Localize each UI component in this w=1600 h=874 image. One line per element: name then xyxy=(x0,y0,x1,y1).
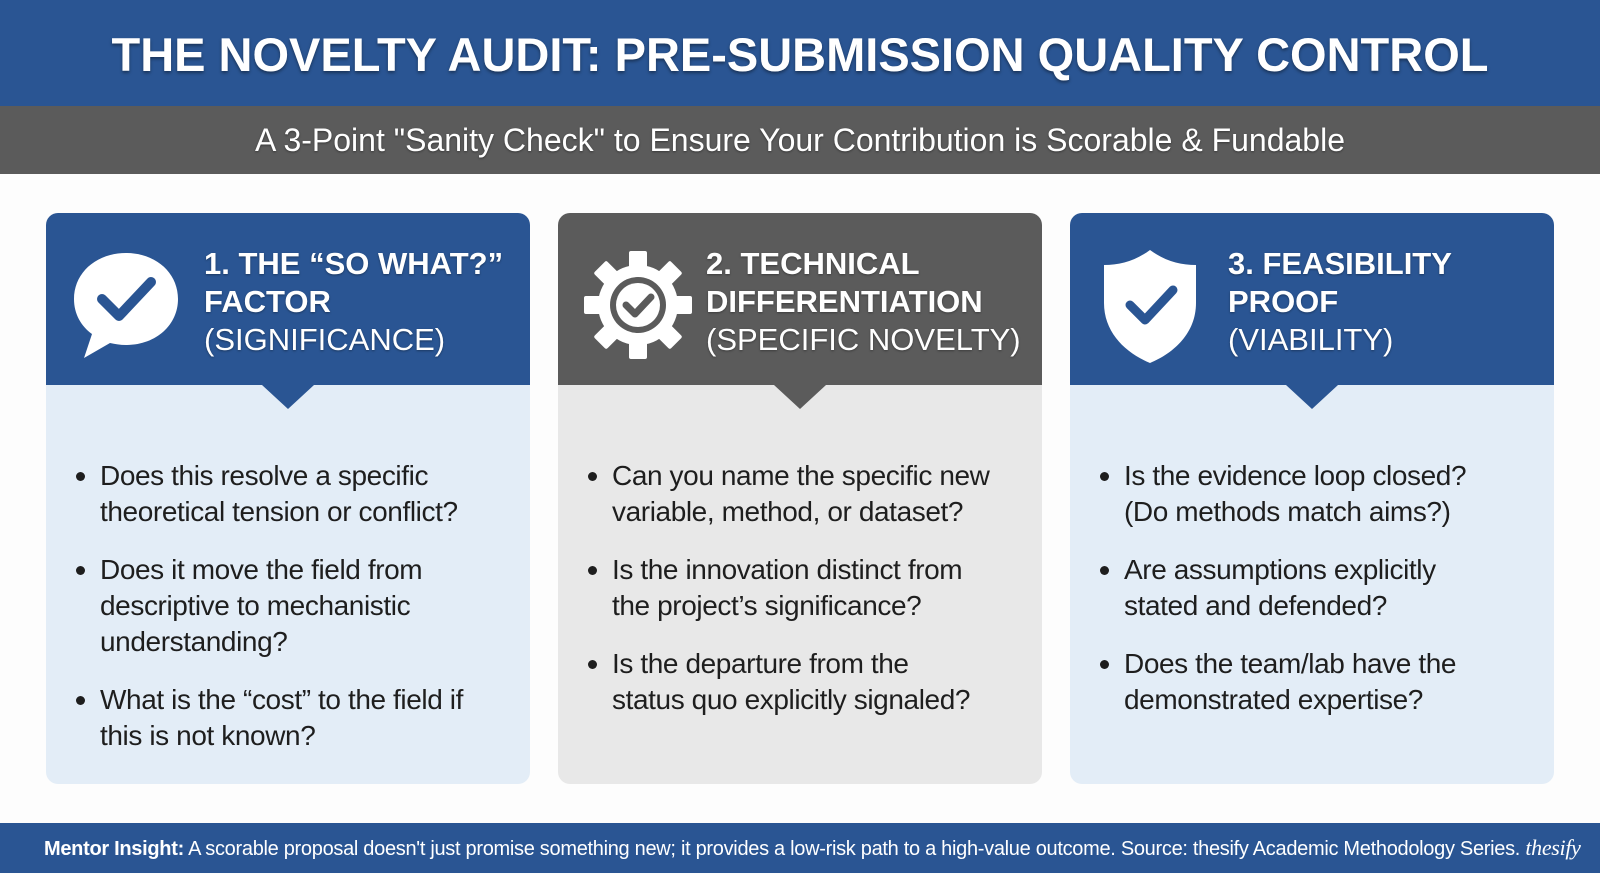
icon: speech bubble check xyxy=(74,253,178,358)
bullets 3: Is the evidence loop closed? xyxy=(1124,460,1466,491)
bullets 2: Is the departure from the xyxy=(612,648,909,679)
icon: gear check xyxy=(584,251,692,359)
heading 1 xyxy=(204,246,503,358)
bullets 1: understanding? xyxy=(100,626,287,657)
bullets 3: Does the team/lab have the xyxy=(1124,648,1456,679)
heading 1: 1. THE “SO WHAT?” xyxy=(204,246,503,281)
bullets 1: this is not known? xyxy=(100,720,315,751)
bullets 2: Can you name the specific new xyxy=(612,460,990,491)
title: THE NOVELTY AUDIT: PRE-SUBMISSION QUALITY CONTROL xyxy=(112,28,1488,81)
bullets 1: Does it move the field from xyxy=(100,554,422,585)
heading 1: FACTOR xyxy=(204,284,331,319)
heading 2: 2. TECHNICAL xyxy=(706,246,920,281)
heading 2: (SPECIFIC NOVELTY) xyxy=(706,322,1021,357)
bullets 2: Is the innovation distinct from xyxy=(612,554,962,585)
bullets 3: demonstrated expertise? xyxy=(1124,684,1423,715)
icon: shield check xyxy=(1104,250,1196,363)
heading 3: (VIABILITY) xyxy=(1228,322,1393,357)
heading 3: 3. FEASIBILITY xyxy=(1228,246,1452,281)
panel: so what factor xyxy=(46,213,530,784)
bullets 3: Are assumptions explicitly xyxy=(1124,554,1436,585)
heading 3: PROOF xyxy=(1228,284,1338,319)
bullets 1: theoretical tension or conflict? xyxy=(100,496,458,527)
bullets 1: What is the “cost” to the field if xyxy=(100,684,463,715)
heading 2: DIFFERENTIATION xyxy=(706,284,983,319)
heading 1: (SIGNIFICANCE) xyxy=(204,322,445,357)
heading 2 xyxy=(706,246,1021,358)
footer: Mentor Insight: A scorable proposal doesn't just promise something new; it provides a low-risk path to a high-value outcome. Source: thesify Academic Methodology Series. thesify xyxy=(44,835,1581,860)
bullets 1: Does this resolve a specific xyxy=(100,460,428,491)
bullets 3: (Do methods match aims?) xyxy=(1124,496,1451,527)
bullets 2: the project’s significance? xyxy=(612,590,921,621)
title xyxy=(0,0,1600,106)
bullets 2: variable, method, or dataset? xyxy=(612,496,963,527)
panel: technical differentiation xyxy=(558,213,1042,784)
bullets 3 xyxy=(1100,460,1466,715)
bullets 2: status quo explicitly signaled? xyxy=(612,684,970,715)
subtitle: A 3-Point "Sanity Check" to Ensure Your Contribution is Scorable & Fundable xyxy=(255,122,1345,158)
footer xyxy=(0,823,1600,873)
subtitle xyxy=(0,106,1600,174)
heading 3 xyxy=(1228,246,1452,358)
panel: feasibility proof xyxy=(1070,213,1554,784)
bullets 2 xyxy=(588,460,990,715)
bullets 1: descriptive to mechanistic xyxy=(100,590,410,621)
bullets 1 xyxy=(76,460,464,751)
bullets 3: stated and defended? xyxy=(1124,590,1387,621)
